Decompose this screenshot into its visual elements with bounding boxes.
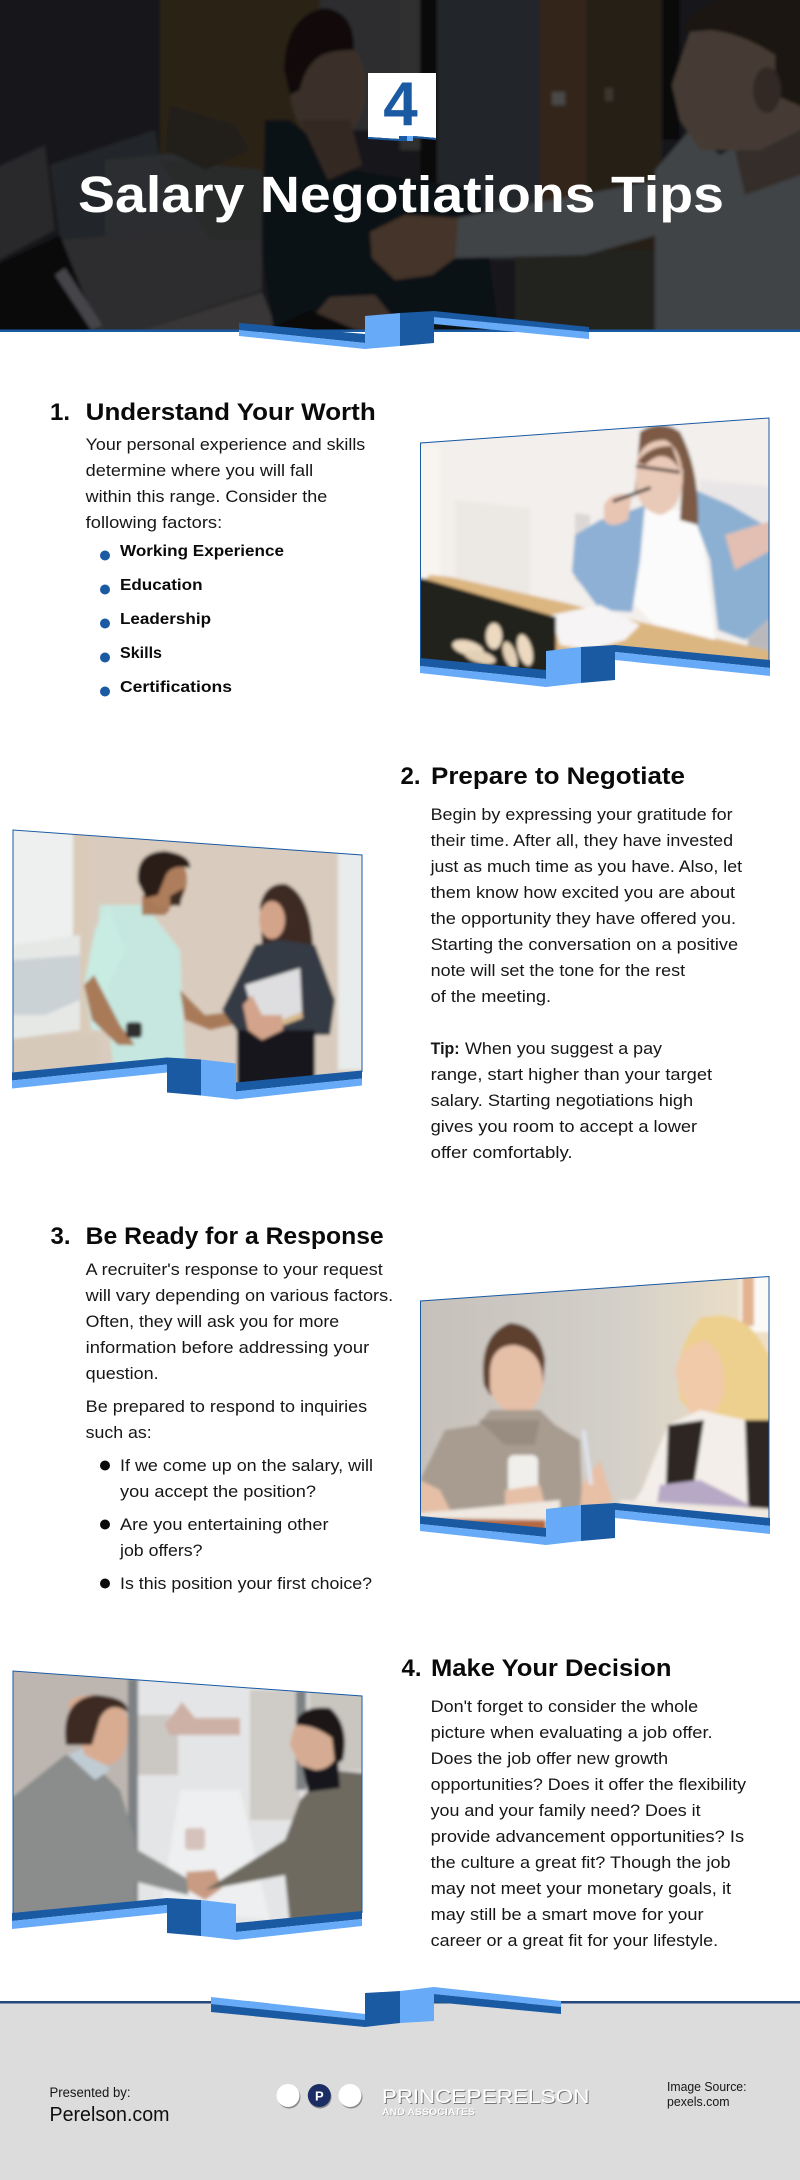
photo 4 frame [13,1671,362,1915]
footer top rule [0,2001,800,2004]
body text 1: determine where you will fall [86,462,313,480]
body text 1: Your personal experience and skills [86,436,365,454]
factor list [100,543,284,696]
question list: Are you entertaining other [120,1516,329,1534]
header banner [0,0,800,350]
photo 2 frame [13,830,362,1074]
factor list: Certifications [120,679,232,696]
factor list: Education [120,577,202,594]
heading 2: 2. [400,763,421,790]
body text 2: the opportunity they have offered you. [431,910,736,928]
body text 3 [85,1261,393,1442]
body text 4: may still be a smart move for your [431,1906,704,1924]
question list: Is this position your first choice? [120,1575,372,1593]
header baseline rule [0,330,800,332]
body text 3: information before addressing your [86,1339,370,1357]
body text 2: note will set the tone for the rest [431,962,686,980]
presented by: Presented by: [50,2085,130,2100]
body text 2: just as much time as you have. Also, let [430,858,743,876]
logo: Prince Perelson and Associates: PRINCE [383,2088,467,2109]
body text 2: them know how excited you are about [431,884,736,902]
question list: job offers? [119,1542,202,1560]
logo: Prince Perelson and Associates: PERELSON [468,2088,590,2109]
section 2: prepare to negotiate [0,763,743,1162]
photo 1: woman thinking at laptop [420,418,770,687]
question list: you accept the position? [120,1483,316,1501]
heading 2: Prepare to Negotiate [431,763,685,790]
logo: Prince Perelson and Associates: PRINCE [382,2087,466,2108]
tip text: offer comfortably. [431,1144,573,1162]
number badge [368,70,436,141]
body text 4: Does the job offer new growth [431,1750,668,1768]
photo 3 frame [420,1276,769,1520]
body text 2: of the meeting. [431,988,551,1006]
section 4: make your decision [0,1650,747,1950]
body text 3: will vary depending on various factors. [85,1287,393,1305]
body text 3: question. [86,1365,159,1383]
logo: Prince Perelson and Associates: P [315,2088,324,2104]
body text 4: you and your family need? Does it [431,1802,701,1820]
image source: Image Source: [667,2080,746,2094]
body text 3: A recruiter's response to your request [86,1261,383,1279]
body text 2: Begin by expressing your gratitude for [431,806,733,824]
footer ribbon [211,1987,561,2027]
photo 3 ribbon [420,1503,770,1545]
tip text: Tip: [431,1040,460,1058]
body text 4: Don't forget to consider the whole [431,1698,698,1716]
logo: Prince Perelson and Associates: AND ASSOCIATES [383,2108,476,2119]
section 3: be ready for a response [50,1223,790,1593]
tip text: When you suggest a pay [465,1040,663,1058]
body text 4: may not meet your monetary goals, it [431,1880,732,1898]
body text 2: Starting the conversation on a positive [431,936,738,954]
body text 3: Often, they will ask you for more [86,1313,339,1331]
photo 1 ribbon [420,645,770,687]
presented by [50,2085,170,2126]
header photo: two men shaking hands [0,0,800,350]
image source [667,2080,746,2109]
body text 1 [85,436,365,532]
photo 2 ribbon [12,1058,362,1100]
body text 1: following factors: [86,514,222,532]
photo 4 ribbon [12,1898,362,1940]
body text 2 [430,806,743,1006]
body text 4 [431,1698,747,1950]
footer [0,1987,800,2180]
factor list: Leadership [120,611,211,628]
image source: pexels.com [667,2095,730,2109]
header ribbon [239,311,589,349]
tip text: salary. Starting negotiations high [431,1092,693,1110]
body text 4: career or a great fit for your lifestyle. [431,1932,718,1950]
factor list: Skills [120,645,162,662]
heading 1: 1. [50,399,70,426]
tip text: gives you room to accept a lower [431,1118,698,1136]
heading 4: Make Your Decision [431,1655,672,1682]
section 1: understand your worth [50,399,790,696]
tip text [431,1040,713,1162]
photo 2: man and woman talking [12,830,362,1100]
logo: Prince Perelson and Associates: PERELSON [466,2087,590,2108]
title: Salary Negotiations Tips [78,166,724,223]
presented by: Perelson.com [50,2104,170,2126]
tip text: range, start higher than your target [431,1066,713,1084]
question list [100,1457,373,1593]
logo: Prince Perelson and Associates: AND ASSOCIATES [382,2107,475,2118]
body text 4: provide advancement opportunities? Is [431,1828,744,1846]
body text 3: such as: [86,1424,152,1442]
photo 3: two women in conversation [420,1276,770,1545]
footer background [0,2002,800,2180]
body text 4: opportunities? Does it offer the flexibility [431,1776,747,1794]
body text 2: their time. After all, they have invested [431,832,733,850]
body text 4: picture when evaluating a job offer. [431,1724,713,1742]
logo: Prince Perelson and Associates [276,2084,590,2119]
question list: If we come up on the salary, will [120,1457,373,1475]
heading 3: Be Ready for a Response [86,1223,384,1250]
heading 3: 3. [50,1223,71,1250]
factor list: Working Experience [120,543,284,560]
photo 1 frame [420,418,769,662]
heading 4: 4. [402,1655,422,1682]
header photo darkening overlay [0,0,800,331]
body text 1: within this range. Consider the [85,488,327,506]
heading 1: Understand Your Worth [86,399,376,426]
number badge: 4 [383,70,418,139]
photo 4: handshake by the window [12,1670,362,1940]
body text 4: the culture a great fit? Though the job [431,1854,731,1872]
body text 3: Be prepared to respond to inquiries [86,1398,367,1416]
